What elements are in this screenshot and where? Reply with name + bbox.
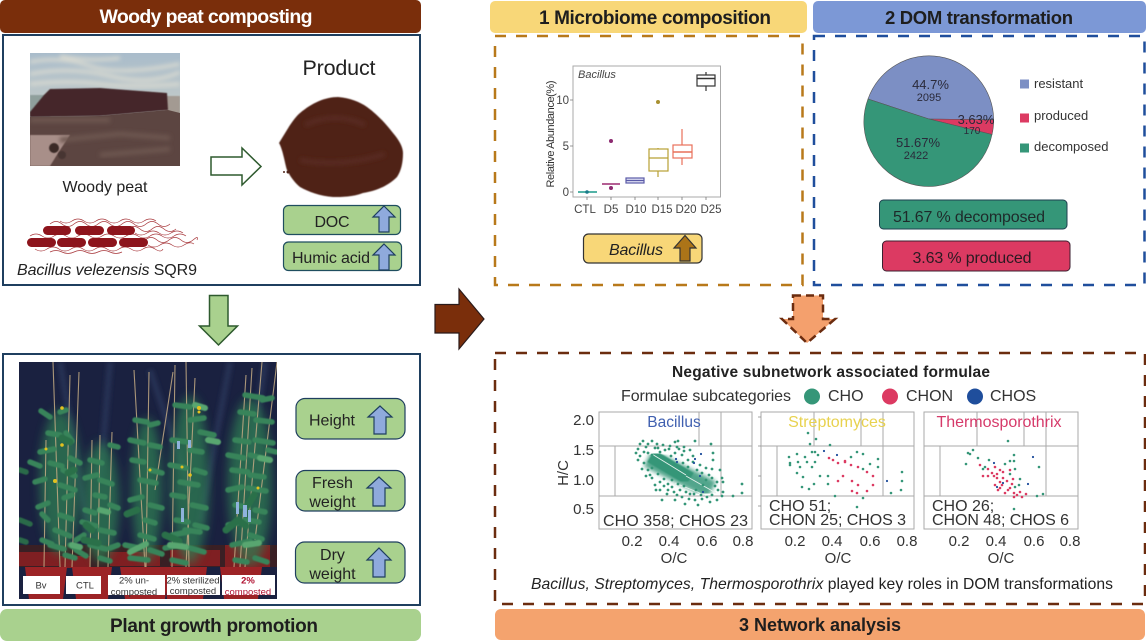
callout: Humic acid up bbox=[284, 242, 402, 270]
heading: 1 Microbiome composition: 1 Microbiome composition bbox=[539, 8, 771, 29]
chart: Streptomyces van Krevelen: CHON 25; CHOS 3 bbox=[769, 512, 906, 529]
heading: Woody peat composting: Woody peat composting bbox=[100, 6, 312, 28]
chart: Streptomyces van Krevelen bbox=[758, 412, 917, 567]
photo labels: 2% sterilized bbox=[166, 576, 220, 586]
legend: pie categories: resistant bbox=[1034, 76, 1084, 91]
chart: Thermosporothrix van Krevelen: CHO 26; bbox=[932, 498, 994, 515]
chart: Bacillus relative abundance boxplot: D5 bbox=[604, 204, 618, 216]
chart: DOM pie: 3.63% bbox=[958, 112, 995, 127]
chart: Bacillus van Krevelen: 1.0 bbox=[573, 472, 594, 489]
chart: Bacillus van Krevelen: O/C bbox=[661, 550, 687, 567]
chart: Bacillus van Krevelen: 0.4 bbox=[659, 533, 679, 550]
chart: Bacillus relative abundance boxplot: 10 bbox=[556, 95, 569, 107]
heading: Woody peat composting bbox=[0, 0, 421, 33]
panel: plant growth bbox=[3, 354, 420, 605]
chart: Bacillus van Krevelen: H/C bbox=[555, 460, 572, 486]
chart: Bacillus van Krevelen: 2.0 bbox=[573, 412, 594, 429]
chart: Bacillus relative abundance boxplot: 0 bbox=[563, 187, 569, 199]
icon: up arrow bbox=[373, 206, 395, 232]
photo labels bbox=[23, 575, 275, 598]
chart: Thermosporothrix van Krevelen bbox=[924, 412, 1080, 567]
label: Bacillus velezensis SQR9: Bacillus velezensis SQR9 bbox=[17, 262, 197, 279]
photo labels: CTL bbox=[76, 580, 94, 592]
panel: microbiome composition bbox=[495, 36, 802, 285]
legend: Formulae subcategories: CHON bbox=[906, 388, 953, 405]
callout: 3.63 % produced bbox=[882, 241, 1070, 271]
chart: Bacillus relative abundance boxplot: D20 bbox=[675, 204, 697, 216]
icon: up arrow bbox=[373, 244, 395, 270]
callout: Bacillus up bbox=[584, 234, 702, 263]
chart: Thermosporothrix van Krevelen: Thermosporothrix bbox=[936, 414, 1062, 431]
box: CTL bbox=[578, 190, 597, 194]
chart: Bacillus van Krevelen: 0.5 bbox=[573, 501, 594, 518]
chart: DOM pie: 51.67% bbox=[896, 135, 940, 150]
callout: Humic acid up: Humic acid bbox=[292, 250, 370, 267]
arrow: dashed orange down bbox=[782, 296, 835, 343]
chart: Bacillus van Krevelen: CHO 358; CHOS 23 bbox=[603, 513, 748, 530]
legend: Formulae subcategories: CHOS bbox=[990, 388, 1036, 405]
flowers and tags bbox=[44, 406, 260, 490]
legend: Formulae subcategories: Formulae subcategories bbox=[621, 388, 791, 405]
legend: pie categories: produced bbox=[1034, 108, 1088, 123]
chart: Thermosporothrix van Krevelen: 0.2 bbox=[949, 533, 969, 550]
photo: woody peat pile bbox=[30, 53, 180, 166]
leaves bbox=[20, 395, 276, 563]
callout: DOC up bbox=[284, 206, 400, 234]
photo labels: composted bbox=[170, 586, 216, 597]
callout: Dry weight up bbox=[296, 542, 405, 583]
icon: up arrow bbox=[368, 406, 392, 434]
label: Product: Product bbox=[302, 56, 376, 80]
chart: Thermosporothrix van Krevelen: 0.6 bbox=[1024, 533, 1044, 550]
chart: Bacillus van Krevelen: 0.8 bbox=[733, 533, 753, 550]
chart: Bacillus relative abundance boxplot: 5 bbox=[563, 141, 569, 153]
heading: 2 DOM transformation: 2 DOM transformation bbox=[885, 7, 1073, 28]
callout: Height up bbox=[296, 398, 405, 439]
legend: pie categories bbox=[1020, 76, 1108, 154]
box: D5 bbox=[602, 139, 620, 190]
caption: key roles: Bacillus, Streptomyces, Thermosporothrix played key roles in DOM transformations bbox=[531, 576, 1113, 593]
heading: 3 Network analysis: 3 Network analysis bbox=[739, 615, 901, 635]
chart: DOM pie: 2095 bbox=[917, 92, 941, 104]
stakes bbox=[44, 362, 277, 567]
callout: Dry weight up: Dry bbox=[320, 547, 345, 564]
callout: 51.67 % decomposed: 51.67 % decomposed bbox=[893, 209, 1045, 226]
chart: Streptomyces van Krevelen: O/C bbox=[825, 550, 851, 567]
chart: DOM pie: 2422 bbox=[904, 150, 928, 162]
chart: Thermosporothrix van Krevelen: CHON 48; CHOS 6 bbox=[932, 512, 1069, 529]
foliage masses bbox=[40, 396, 272, 566]
panel: woody peat composting bbox=[3, 35, 420, 285]
chart: Thermosporothrix van Krevelen: 0.8 bbox=[1060, 533, 1080, 550]
title: Negative subnetwork associated formulae: Negative subnetwork associated formulae bbox=[672, 364, 990, 381]
chart: Bacillus van Krevelen: Bacillus bbox=[647, 414, 701, 431]
chart: Thermosporothrix van Krevelen: 0.4 bbox=[986, 533, 1006, 550]
photo labels: composted bbox=[111, 587, 157, 598]
heading: 1 Microbiome composition bbox=[490, 1, 807, 33]
chart: DOM pie bbox=[864, 56, 995, 186]
chart: Streptomyces van Krevelen: 0.8 bbox=[897, 533, 917, 550]
label: Woody peat: Woody peat bbox=[62, 179, 148, 196]
chart: Bacillus relative abundance boxplot bbox=[545, 66, 722, 216]
callout: Fresh weight up bbox=[296, 470, 405, 511]
heading: 2 DOM transformation bbox=[813, 1, 1146, 33]
chart: Bacillus relative abundance boxplot: D10 bbox=[625, 204, 647, 216]
chart: Streptomyces van Krevelen: CHO 51; bbox=[769, 498, 831, 515]
callout: Fresh weight up: weight bbox=[308, 494, 356, 511]
panel: DOM transformation bbox=[814, 36, 1144, 285]
heading: Plant growth promotion bbox=[0, 609, 421, 641]
photo labels: 2% un- bbox=[119, 576, 149, 586]
legend: pie categories: decomposed bbox=[1034, 139, 1108, 154]
photo labels: 2% bbox=[241, 576, 255, 586]
chart: DOM pie: 44.7% bbox=[912, 77, 949, 92]
chart: Thermosporothrix van Krevelen: O/C bbox=[988, 550, 1014, 567]
heading: 3 Network analysis bbox=[495, 609, 1145, 640]
chart: Bacillus relative abundance boxplot: D15 bbox=[651, 204, 673, 216]
box: D20 bbox=[673, 129, 692, 165]
photo: cucumber plants bbox=[19, 362, 277, 599]
chart: Bacillus van Krevelen: 1.5 bbox=[573, 442, 594, 459]
icon: up arrow bbox=[674, 236, 696, 261]
callout: Bacillus up: Bacillus bbox=[609, 242, 663, 259]
pots bbox=[25, 567, 262, 599]
callout: 3.63 % produced: 3.63 % produced bbox=[912, 250, 1032, 267]
callout: 51.67 % decomposed bbox=[880, 200, 1067, 229]
legend: Formulae subcategories bbox=[621, 388, 1036, 405]
callout: DOC up: DOC bbox=[314, 214, 350, 231]
chart: Streptomyces van Krevelen: 0.6 bbox=[860, 533, 880, 550]
photo labels: composted bbox=[225, 587, 271, 598]
chart: Bacillus relative abundance boxplot: Relative Abundance(%) bbox=[545, 80, 557, 188]
box: D10 bbox=[626, 178, 644, 183]
heading: Plant growth promotion: Plant growth promotion bbox=[110, 616, 318, 637]
panel: network analysis bbox=[495, 353, 1145, 604]
chart: Streptomyces van Krevelen: 0.2 bbox=[785, 533, 805, 550]
box: D25 bbox=[697, 72, 715, 91]
photo labels: Bv bbox=[35, 580, 47, 592]
chart: Bacillus van Krevelen: 0.6 bbox=[697, 533, 717, 550]
chart: Streptomyces van Krevelen: Streptomyces bbox=[788, 414, 886, 431]
callout: Dry weight up: weight bbox=[308, 566, 356, 583]
arrow: down to plant panel bbox=[200, 296, 238, 345]
arrow: outlined right bbox=[211, 148, 261, 185]
callout: Height up: Height bbox=[309, 412, 356, 430]
icon: up arrow bbox=[367, 477, 391, 506]
icon: Bacillus velezensis cells bbox=[27, 219, 198, 254]
callout: Fresh weight up: Fresh bbox=[312, 475, 353, 492]
photo: compost product powder bbox=[279, 97, 403, 197]
arrow: main flow right bbox=[435, 289, 484, 349]
chart: Bacillus relative abundance boxplot: D25 bbox=[700, 204, 722, 216]
legend: Formulae subcategories: CHO bbox=[828, 388, 864, 405]
chart: DOM pie: 170 bbox=[964, 126, 981, 137]
chart: Bacillus relative abundance boxplot: Bacillus bbox=[578, 69, 616, 81]
chart: Bacillus van Krevelen: 0.2 bbox=[622, 533, 642, 550]
chart: Bacillus relative abundance boxplot: CTL bbox=[574, 204, 596, 216]
box: D15 bbox=[649, 100, 668, 177]
chart: Streptomyces van Krevelen: 0.4 bbox=[822, 533, 842, 550]
chart: Bacillus van Krevelen bbox=[555, 412, 753, 567]
icon: up arrow bbox=[367, 548, 391, 577]
